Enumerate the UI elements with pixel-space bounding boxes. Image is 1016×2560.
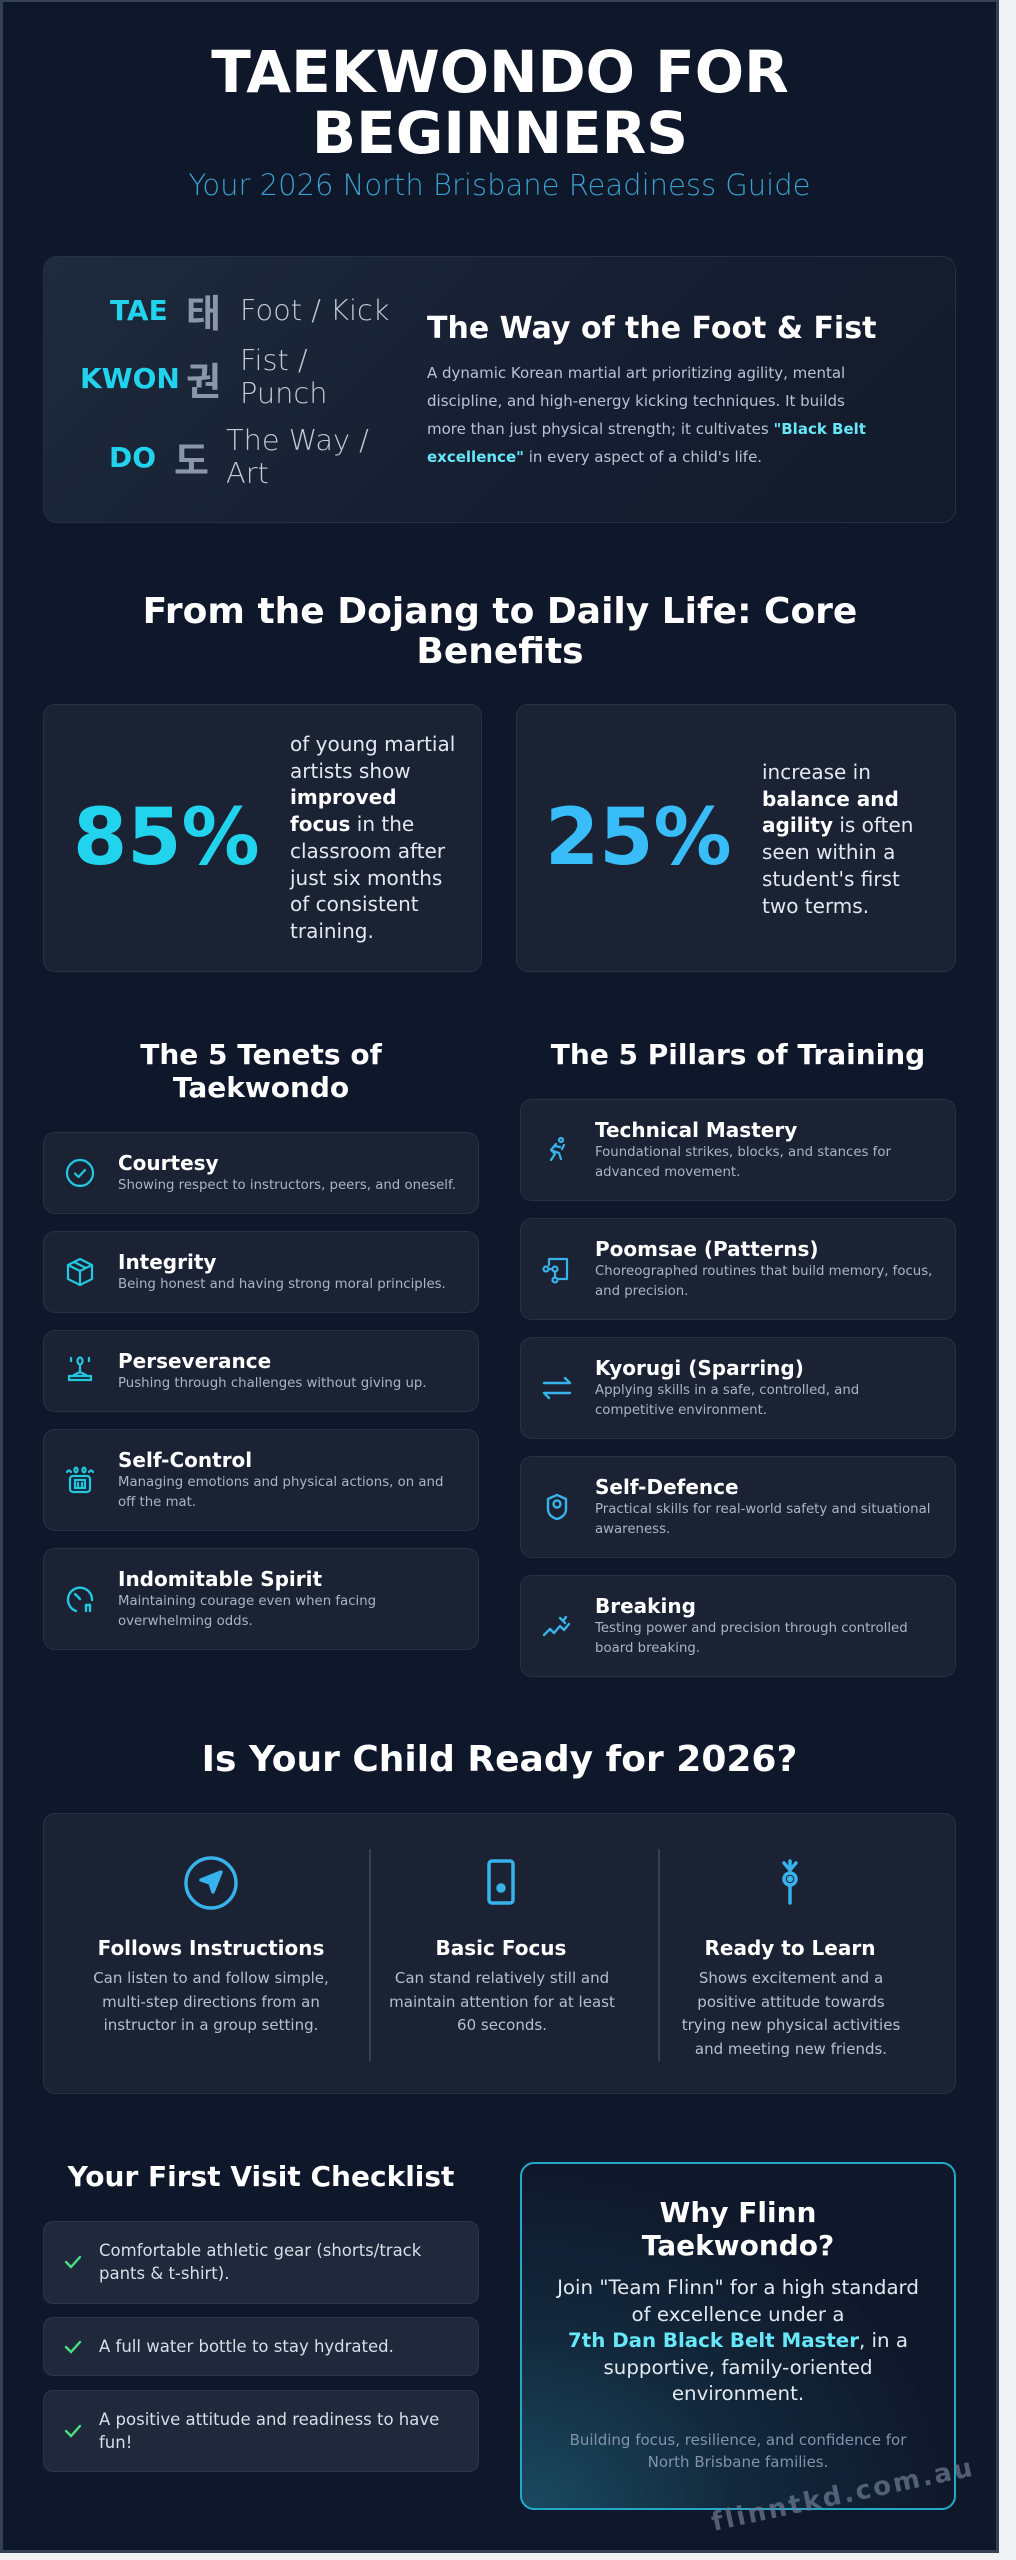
text: why body: of excellence under a (632, 2303, 844, 2326)
criterion: follows instructions: Can listen to and follow simple, (93, 1969, 329, 1987)
pillar: breaking (520, 1575, 956, 1677)
heading: why flinn: Taekwondo? (642, 2229, 834, 2262)
panel: why flinn (520, 2162, 956, 2510)
pillar: self-defence: Self-Defence (595, 1475, 739, 1499)
criterion: ready to learn: Ready to Learn (705, 1936, 875, 1960)
criterion: basic focus: 60 seconds. (457, 2016, 547, 2034)
meaning: the way / art: The Way / (226, 423, 369, 457)
text: why body (556, 2276, 919, 2405)
tenet: courtesy: Showing respect to instructors, peers, and oneself. (118, 1178, 456, 1193)
text: why body: supportive, family-oriented (603, 2356, 873, 2379)
panel: tenets list (43, 1132, 479, 1650)
subtitle: Your 2026 North Brisbane Readiness Guide (189, 168, 810, 202)
text: why footer (570, 2431, 906, 2471)
criterion: basic focus (369, 1849, 631, 2061)
stat text: just six months (290, 866, 442, 890)
criterion: follows instructions: Follows Instructions (98, 1936, 324, 1960)
tenet: indomitable spirit: Maintaining courage even when facing overwhelming odds. (118, 1594, 376, 1629)
pillar: poomsae: Choreographed routines that build memory, focus, and precision. (595, 1264, 932, 1299)
heading: 5 pillars: The 5 Pillars of Training (551, 1038, 925, 1071)
pillar: technical mastery: Foundational strikes, blocks, and stances for advanced movement. (595, 1145, 891, 1180)
tenet: self-control (43, 1429, 479, 1531)
item: water bottle: A full water bottle to stay hydrated. (99, 2337, 394, 2356)
panel: pillars list (520, 1099, 956, 1677)
stat text: focus in the (290, 812, 414, 836)
pillar: poomsae (520, 1218, 956, 1320)
pillar: self-defence: Practical skills for real-world safety and situational awareness. (595, 1502, 930, 1537)
pillar: kyorugi: Kyorugi (Sparring) (595, 1356, 804, 1380)
title: TAEKWONDO FOR BEGINNERS (211, 38, 789, 167)
stat text: seen within a (762, 840, 895, 864)
icon: device (487, 1859, 515, 1905)
stat text: classroom after (290, 839, 445, 863)
tenet: perseverance (43, 1330, 479, 1412)
item: water bottle (43, 2317, 479, 2376)
text: intro paragraph: excellence" in every aspect of a child's life. (427, 448, 762, 466)
meaning: fist / punch (240, 343, 327, 410)
korean: do: 도 (174, 430, 209, 485)
stat text: balance and (762, 787, 899, 811)
text: why body: environment. (672, 2382, 804, 2405)
tenet: self-control: Self-Control (118, 1448, 252, 1472)
criterion: basic focus: Basic Focus (436, 1936, 566, 1960)
stat text (762, 760, 913, 918)
text: why body: Join "Team Flinn" for a high standard (557, 2276, 919, 2299)
criterion: ready to learn: Shows excitement and a (699, 1969, 883, 1987)
tenet: perseverance: Pushing through challenges without giving up. (118, 1376, 427, 1391)
pillar: technical mastery: Technical Mastery (595, 1118, 797, 1142)
criterion: basic focus: Can stand relatively still and (395, 1969, 609, 1987)
stat text: artists show (290, 759, 411, 783)
criterion: ready to learn: positive attitude towards (697, 1992, 885, 2010)
text: why body: 7th Dan Black Belt Master, in a (568, 2329, 908, 2352)
stat text: training. (290, 919, 374, 943)
meaning: fist / punch: Punch (240, 376, 327, 410)
icon: key (782, 1859, 798, 1905)
meaning: the way / art: Art (226, 456, 269, 490)
icon: navigation (184, 1856, 238, 1910)
panel: intro meaning card (43, 256, 956, 523)
tenet: indomitable spirit: Indomitable Spirit (118, 1567, 322, 1591)
panel: stat 85% (43, 704, 482, 972)
heading: core benefits: From the Dojang to Daily Life: Core Benefits (143, 591, 857, 672)
tenet: perseverance: Perseverance (118, 1349, 271, 1373)
tenet: integrity: Integrity (118, 1250, 216, 1274)
criterion: ready to learn (658, 1849, 920, 2061)
stat number: 85% (73, 793, 260, 883)
heading: 5 tenets: The 5 Tenets of Taekwondo (140, 1038, 382, 1104)
meaning: the way / art (226, 423, 369, 490)
meaning: fist / punch: Fist / (240, 343, 308, 377)
item: athletic gear: Comfortable athletic gear (shorts/track pants & t-shirt). (99, 2241, 421, 2283)
korean: tae: 태 (186, 283, 221, 338)
text: intro paragraph: more than just physical strength; it cultivates "Black Belt (427, 420, 866, 438)
stat text: two terms. (762, 894, 869, 918)
stat text: agility is often (762, 813, 913, 837)
pillar: kyorugi: Applying skills in a safe, controlled, and competitive environment. (595, 1383, 859, 1418)
tenet: courtesy: Courtesy (118, 1151, 219, 1175)
text: why footer: North Brisbane families. (648, 2453, 828, 2471)
pillar: poomsae: Poomsae (Patterns) (595, 1237, 818, 1261)
criterion: follows instructions: instructor in a group setting. (104, 2016, 318, 2034)
tenet: integrity (43, 1231, 479, 1313)
heading: readiness: Is Your Child Ready for 2026? (202, 1739, 797, 1780)
criterion: basic focus: maintain attention for at least (389, 1992, 615, 2010)
pillar: breaking: Testing power and precision through controlled board breaking. (595, 1621, 908, 1656)
item: athletic gear (43, 2221, 479, 2304)
stat text: of young martial (290, 732, 455, 756)
panel: readiness criteria (43, 1813, 956, 2094)
heading: why flinn (642, 2196, 834, 2262)
panel: checklist items (43, 2221, 479, 2472)
tenet: integrity: Being honest and having strong moral principles. (118, 1277, 446, 1292)
term: TAE: TAE (110, 294, 168, 327)
korean: kwon: 권 (186, 351, 221, 406)
criterion: ready to learn: and meeting new friends. (695, 2040, 887, 2058)
stat number: 25% (545, 793, 732, 883)
term: KWON: KWON (80, 362, 180, 395)
pillar: self-defence (520, 1456, 956, 1558)
text: intro paragraph: discipline, and high-energy kicking techniques. It builds (427, 392, 845, 410)
item: positive attitude: A positive attitude and readiness to have fun! (99, 2410, 439, 2452)
watermark: flinntkd.com.au (709, 2453, 977, 2538)
text: intro paragraph: A dynamic Korean martial art prioritizing agility, mental (427, 364, 845, 382)
heading: way of foot and fist: The Way of the Foot & Fist (427, 311, 876, 346)
stat text: improved (290, 785, 397, 809)
tenet: self-control: Managing emotions and physical actions, on and off the mat. (118, 1475, 443, 1510)
item: positive attitude (43, 2390, 479, 2472)
meaning: foot / kick: Foot / Kick (240, 293, 389, 327)
heading: why flinn: Why Flinn (659, 2196, 816, 2229)
stat text: student's first (762, 867, 900, 891)
term: DO: DO (109, 441, 156, 474)
text: why footer: Building focus, resilience, and confidence for (570, 2431, 906, 2449)
pillar: breaking: Breaking (595, 1594, 696, 1618)
panel: stat 25% (516, 704, 956, 972)
heading: checklist: Your First Visit Checklist (68, 2160, 454, 2193)
stat text: increase in (762, 760, 871, 784)
criterion: follows instructions (93, 1856, 329, 2034)
pillar: technical mastery (520, 1099, 956, 1201)
tenet: courtesy (43, 1132, 479, 1214)
tenet: indomitable spirit (43, 1548, 479, 1650)
pillar: kyorugi (520, 1337, 956, 1439)
criterion: ready to learn: trying new physical activities (682, 2016, 900, 2034)
text: intro paragraph (427, 364, 866, 466)
stat text (290, 732, 455, 943)
stat text: of consistent (290, 892, 419, 916)
criterion: follows instructions: multi-step directions from an (102, 1992, 320, 2010)
